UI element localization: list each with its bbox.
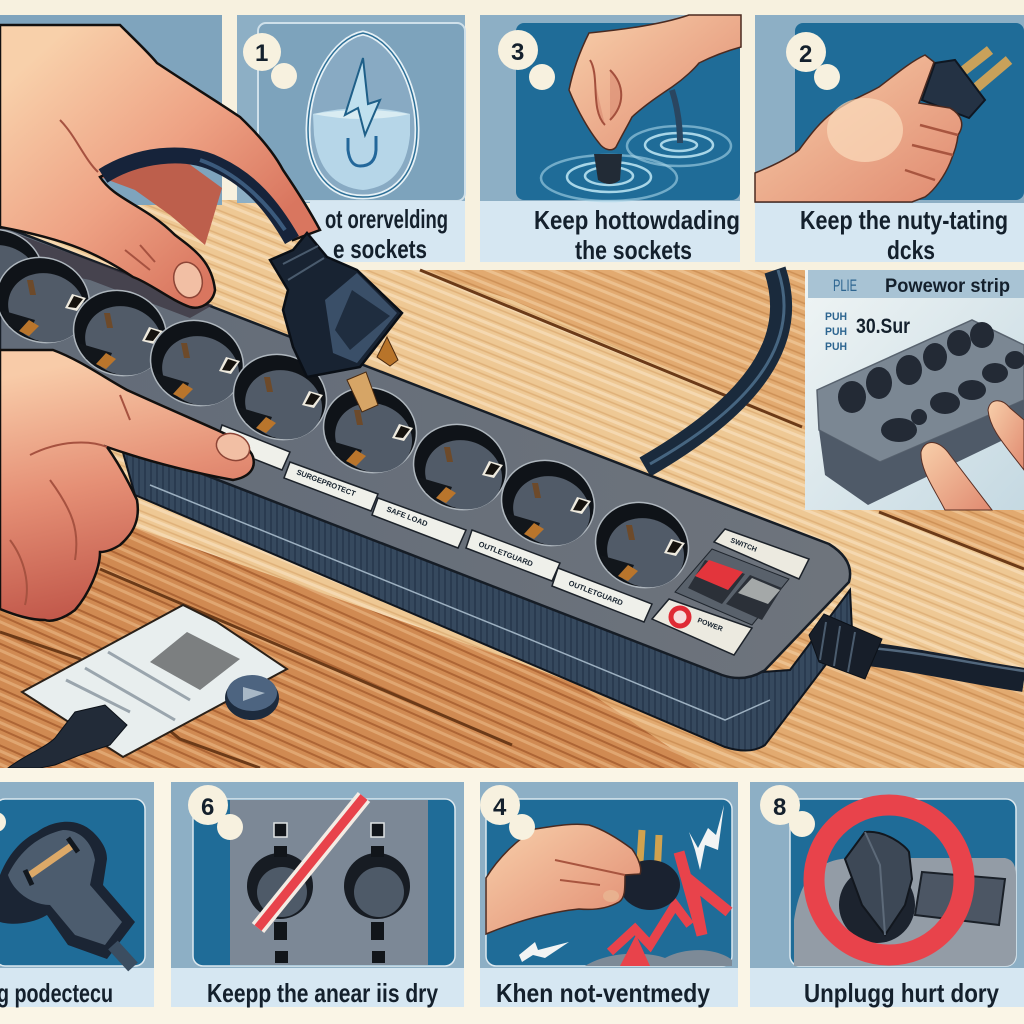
caption: Unplugg hurt dory (804, 978, 999, 1008)
inset text: PUH (825, 341, 847, 353)
inset: power strip detail (805, 270, 1024, 510)
label text: SURGEPROTECT (295, 467, 357, 498)
number badge 6: 6 (201, 794, 214, 821)
switch panel (652, 529, 809, 655)
panel: top-left background (0, 15, 222, 205)
inset strip (817, 320, 1024, 462)
number badge 8 (760, 785, 815, 837)
power cord right (809, 614, 1024, 680)
icon: red slash (258, 797, 364, 928)
icon: plug body (922, 60, 985, 118)
inset text: PUH (825, 326, 847, 338)
inset text: PUH (825, 311, 847, 323)
icon: cord in water (672, 90, 680, 143)
icon: water drop with lightning (308, 33, 417, 197)
label text: OUTLETGUARD (477, 539, 535, 569)
number badge 1: 1 (255, 40, 268, 67)
cable behind strip (645, 270, 784, 467)
panel: bottom 4 unplug (750, 782, 1024, 1008)
number badge 2 (786, 32, 840, 90)
strip labels (216, 425, 652, 622)
caption: Khen not-ventmedy (496, 978, 710, 1008)
plug (270, 233, 402, 412)
number badge 3: 3 (511, 39, 524, 66)
icon: ground clouds (585, 950, 732, 966)
icon: socket (915, 872, 1005, 925)
caption: g podectecu (0, 978, 113, 1008)
inset sockets (838, 322, 1024, 442)
icon: plug body (620, 860, 680, 910)
sockets (0, 216, 701, 601)
panel: step 1 water warning (237, 15, 465, 264)
icon: red ring (814, 805, 964, 955)
plug body (270, 233, 402, 377)
icon: hand (486, 824, 641, 934)
icon: plug (0, 822, 135, 967)
small plug and cable (8, 705, 127, 768)
cable in hand (103, 155, 292, 240)
strip side (120, 442, 852, 751)
icon: plug prongs (640, 830, 659, 876)
panel: step 2 hand and plug: dcks (887, 235, 935, 265)
number badge 1 (243, 33, 297, 89)
panel: step 1 water warning: e sockets (333, 234, 427, 264)
caption: ot orervelding (325, 204, 448, 234)
round button (225, 675, 279, 720)
badge (0, 812, 6, 832)
icon: fist (755, 55, 962, 202)
label text: SAFE LOAD (385, 504, 430, 529)
inset text: 30.Sur (856, 315, 910, 338)
label text (295, 467, 625, 608)
number badge 6 (188, 785, 243, 840)
icon: plug in water (594, 154, 622, 184)
panel: bottom 3 lightning (480, 782, 738, 1008)
icon: plug prongs (962, 50, 1009, 88)
leaflet on table (8, 605, 287, 768)
panel: step 2 hand and plug (755, 15, 1024, 265)
left hand pointing (0, 350, 254, 621)
power strip (0, 216, 852, 751)
icon: ripples (541, 126, 731, 201)
switch panel: SWITCH (729, 537, 758, 554)
switch panel: POWER (696, 617, 723, 633)
finger nail (213, 429, 253, 465)
number badge 8: 8 (773, 794, 786, 821)
strip top surface (0, 225, 850, 678)
top hand (0, 25, 320, 308)
panel: bottom 1 plug (0, 782, 154, 1008)
icon: hand (569, 15, 741, 150)
number badge 4: 4 (493, 794, 507, 821)
icon: knob (839, 832, 915, 943)
number badge 2: 2 (799, 41, 812, 68)
label text: OUTLETGUARD (567, 578, 625, 608)
palm shadow (100, 150, 222, 245)
panel: bottom 2 socket (171, 782, 464, 1008)
inset text: PLIE (833, 276, 857, 295)
hand shadow on strip (0, 228, 213, 318)
inset text (825, 276, 1010, 353)
caption: Keepp the anear iis dry (207, 978, 438, 1008)
icon: lightning bolts (519, 805, 729, 966)
icon: outlets (247, 823, 410, 963)
front prong (347, 372, 378, 412)
inset fingers (921, 443, 992, 510)
bottom strip background (0, 768, 1024, 1024)
wooden table (0, 200, 1024, 768)
caption: Keep hottowdading (534, 205, 740, 235)
number badge 3 (498, 30, 555, 90)
number badge 4 (480, 785, 535, 840)
inset text: Powewor strip (885, 276, 1010, 297)
icon: socket device (794, 858, 1016, 966)
panel: step 3 water ripple (480, 15, 741, 265)
panel: step 3 water ripple: the sockets (575, 235, 692, 265)
back prong (377, 337, 398, 366)
thumb nail (170, 259, 206, 301)
